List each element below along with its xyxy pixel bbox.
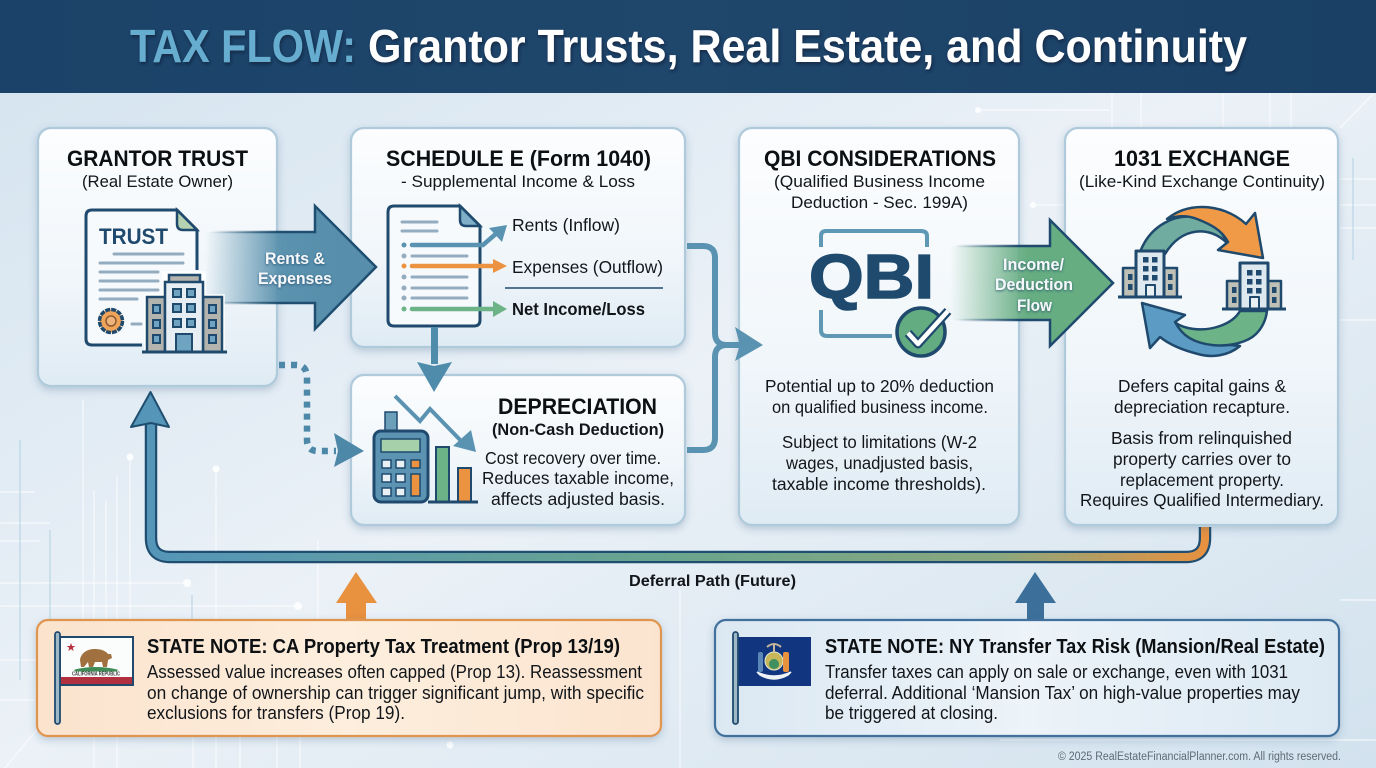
panel: 1031 exchange	[1065, 128, 1338, 525]
icon: trust document with building: TRUST	[99, 224, 169, 249]
arrow: rents and expenses: Rents &	[265, 250, 325, 268]
text: QBI deduction: on qualified business income.	[772, 397, 988, 417]
connector: bracket to QBI	[687, 246, 763, 450]
heading: NY note: STATE NOTE: NY Transfer Tax Risk (Mansion/Real Estate)	[825, 636, 1325, 658]
icon: California flag	[55, 632, 133, 724]
header banner	[0, 0, 1376, 93]
arrow: dotted trust to depreciation	[279, 365, 364, 467]
text: depreciation description	[482, 448, 674, 509]
text: CA note body: on change of ownership can trigger significant jump, with specific	[147, 683, 644, 703]
subheading: grantor trust: (Real Estate Owner)	[82, 172, 233, 191]
text: 1031 basis: Requires Qualified Intermediary.	[1080, 490, 1324, 510]
icon: schedule document	[388, 206, 480, 326]
subheading: schedule E: - Supplemental Income & Loss	[401, 172, 635, 191]
text: QBI limitations: Subject to limitations (W-2	[782, 432, 977, 452]
arrow: income deduction flow: Income/	[1003, 256, 1064, 274]
text: QBI limitations: wages, unadjusted basis,	[785, 453, 973, 473]
heading: schedule E: SCHEDULE E (Form 1040)	[386, 146, 651, 171]
icon: QBI with check: QBI	[809, 243, 934, 312]
panel: NY state note	[715, 620, 1339, 736]
label: net income: Net Income/Loss	[512, 299, 645, 319]
icon: QBI with check	[809, 231, 948, 356]
arrow: expenses outflow	[412, 259, 507, 273]
heading: grantor trust: GRANTOR TRUST	[67, 146, 249, 171]
title: Grantor Trusts, Real Estate, and Continuity	[368, 20, 1247, 72]
panel: schedule E	[351, 128, 685, 347]
subheading: QBI: (Qualified Business Income	[774, 172, 985, 191]
text: QBI limitations	[772, 432, 986, 494]
arrow: income deduction flow: Flow	[1017, 297, 1052, 315]
panel: QBI considerations	[739, 128, 1019, 525]
subheading: QBI	[774, 172, 985, 212]
text: NY note body: Transfer taxes can apply on sale or exchange, even with 1031	[825, 662, 1288, 682]
arrow: NY note up	[1015, 572, 1056, 622]
arrow: income deduction flow	[950, 220, 1113, 346]
text: depreciation description: affects adjusted basis.	[491, 489, 665, 509]
text: depreciation description: Cost recovery over time.	[485, 448, 661, 468]
arrow: net income	[412, 301, 507, 317]
icon: exchange cycle with buildings	[1118, 207, 1286, 356]
text: NY note body	[825, 662, 1300, 723]
text: NY note body: be triggered at closing.	[825, 703, 998, 723]
heading: depreciation: DEPRECIATION	[498, 394, 657, 419]
text: 1031 basis: Basis from relinquished	[1111, 428, 1292, 448]
deferral loop arrow	[131, 392, 1205, 557]
icon: calculator and falling chart	[374, 396, 478, 502]
subheading: 1031 exchange: (Like-Kind Exchange Continuity)	[1079, 172, 1325, 191]
arrow: rents and expenses: Expenses	[258, 270, 332, 288]
text: 1031 deferral: Defers capital gains &	[1118, 376, 1286, 396]
text: 1031 basis: property carries over to	[1113, 449, 1291, 469]
arrow: schedule E to depreciation	[417, 327, 452, 392]
text: CA note body: exclusions for transfers (Prop 19).	[147, 703, 405, 723]
title: TAX FLOW:	[130, 20, 356, 72]
label: deferral path: Deferral Path (Future)	[629, 573, 796, 590]
copyright: © 2025 RealEstateFinancialPlanner.com. All rights reserved.	[1058, 751, 1341, 763]
text: QBI deduction: Potential up to 20% deduction	[765, 376, 994, 396]
subheading: depreciation: (Non-Cash Deduction)	[492, 420, 664, 439]
label: expenses: Expenses (Outflow)	[512, 257, 663, 277]
icon: trust document with building	[86, 210, 227, 352]
heading: QBI: QBI CONSIDERATIONS	[764, 146, 996, 171]
icon: New York flag	[733, 632, 811, 724]
heading: CA note: STATE NOTE: CA Property Tax Treatment (Prop 13/19)	[147, 636, 620, 658]
text: 1031 basis	[1080, 428, 1324, 510]
text: QBI limitations: taxable income thresholds).	[772, 474, 986, 494]
panel: depreciation	[351, 375, 685, 525]
arrow: CA note up	[336, 572, 377, 622]
label: rents: Rents (Inflow)	[512, 215, 620, 235]
text: 1031 deferral: depreciation recapture.	[1114, 397, 1290, 417]
arrow: income deduction flow: Deduction	[995, 276, 1073, 294]
text: CA note body	[147, 662, 644, 723]
text: QBI deduction	[765, 376, 994, 417]
text: CA note body: Assessed value increases often capped (Prop 13). Reassessment	[147, 662, 642, 682]
panel: grantor trust	[38, 128, 277, 386]
panel: CA state note	[37, 620, 661, 736]
text: depreciation description: Reduces taxable income,	[482, 468, 674, 488]
arrow: rents inflow	[412, 225, 507, 245]
text: NY note body: deferral. Additional ‘Mansion Tax’ on high-value properties may	[825, 683, 1300, 703]
text: 1031 basis: replacement property.	[1120, 470, 1284, 490]
icon: California flag: CALIFORNIA REPUBLIC	[72, 672, 120, 678]
arrow: rents and expenses	[205, 206, 376, 329]
heading: 1031 exchange: 1031 EXCHANGE	[1114, 146, 1290, 171]
text: 1031 deferral	[1114, 376, 1290, 417]
subheading: QBI: Deduction - Sec. 199A)	[791, 193, 968, 212]
